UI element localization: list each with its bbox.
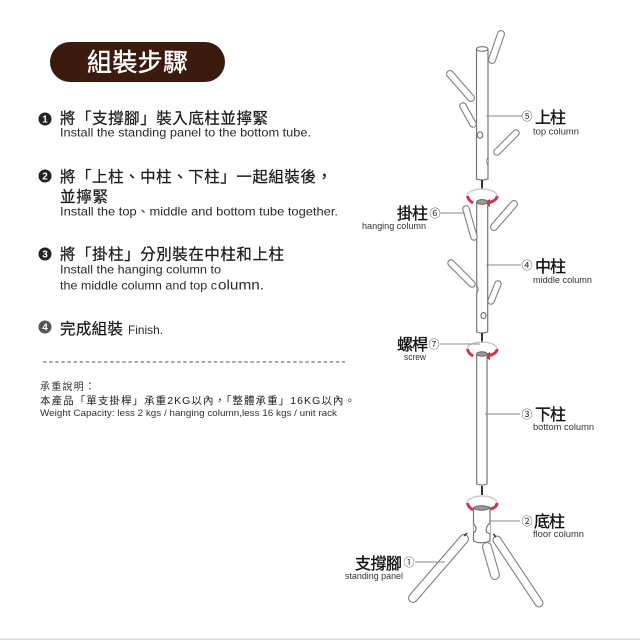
title pill: 組裝步驟 — [87, 49, 188, 77]
top column hanging pegs — [450, 34, 516, 152]
top column — [476, 47, 488, 189]
label: middle column — [486, 257, 592, 285]
bottom column — [477, 352, 487, 495]
label: top column: ⑤ — [522, 108, 532, 124]
step 1 — [38, 110, 311, 140]
label: middle column: ④ — [522, 257, 532, 273]
middle column — [477, 200, 488, 343]
label: screw: 螺桿 — [397, 336, 428, 354]
label: bottom column — [485, 406, 594, 432]
rotate arrow ring 1 — [467, 189, 497, 207]
step 1: Install the standing panel to the bottom tube. — [60, 126, 311, 140]
label: hanging column: 掛柱 — [397, 205, 428, 223]
label: middle column: middle column — [533, 275, 592, 285]
label: top column: top column — [533, 126, 579, 136]
rotate arrow ring 2 — [467, 342, 497, 360]
label: top column: 上柱 — [535, 109, 566, 127]
label: standing panel: standing panel — [345, 571, 403, 581]
step 3: Install the hanging column to — [60, 262, 221, 276]
step 1: 1 — [42, 114, 48, 126]
weight capacity note: 本產品「單支掛桿」承重2KG以內，「整體承重」16KG以內。 — [40, 394, 355, 407]
floor column — [474, 506, 490, 543]
label: screw: screw — [404, 352, 426, 362]
middle column hanging pegs — [451, 204, 514, 301]
weight capacity note: Weight Capacity: less 2 kgs / hanging column,less 16 kgs / unit rack — [40, 408, 337, 419]
label: bottom column: bottom column — [533, 422, 594, 432]
label: floor column: 底柱 — [534, 513, 565, 531]
label: floor column: floor column — [533, 529, 584, 539]
step 1: 將「支撐腳」裝入底柱並擰緊 — [60, 110, 268, 128]
step 3: the middle column and top c — [60, 278, 217, 292]
label: screw — [397, 336, 480, 362]
label: floor column: ② — [522, 513, 532, 529]
standing legs — [413, 532, 539, 603]
label: hanging column — [362, 205, 465, 231]
label: bottom column: 下柱 — [535, 406, 566, 424]
label: standing panel: ① — [404, 554, 414, 570]
label: standing panel — [345, 554, 445, 581]
label: bottom column: ③ — [522, 406, 532, 422]
step 4: Finish. — [128, 323, 163, 337]
step 2: 將「上柱、中柱、下柱」一起組裝後， — [60, 168, 332, 186]
weight capacity note — [40, 380, 355, 419]
label: standing panel: 支撐腳 — [355, 555, 402, 573]
rotate arrow ring 3 — [467, 496, 497, 514]
step 3: 將「掛柱」分別裝在中柱和上柱 — [60, 246, 284, 264]
step 2: 2 — [42, 172, 48, 182]
step 3 — [38, 246, 284, 292]
step 4: 完成組裝 — [60, 320, 123, 338]
diagram: coat rack exploded view — [413, 34, 539, 603]
step 3: 3 — [42, 250, 48, 260]
label: hanging column: hanging column — [362, 221, 426, 231]
label: middle column: 中柱 — [535, 258, 566, 276]
label: hanging column: ⑥ — [430, 205, 440, 221]
weight capacity note: 承重說明： — [40, 380, 95, 393]
step 2: 並擰緊 — [60, 188, 108, 206]
step 3: olumn. — [218, 276, 264, 292]
step 2: Install the top、middle and bottom tube together. — [60, 204, 338, 218]
step 4: 4 — [42, 322, 48, 334]
step 2 — [38, 168, 338, 218]
step 4 — [38, 320, 163, 338]
label: floor column — [489, 513, 584, 539]
title pill — [50, 42, 225, 82]
label: top column — [486, 108, 579, 136]
label: screw: ⑦ — [428, 336, 440, 352]
